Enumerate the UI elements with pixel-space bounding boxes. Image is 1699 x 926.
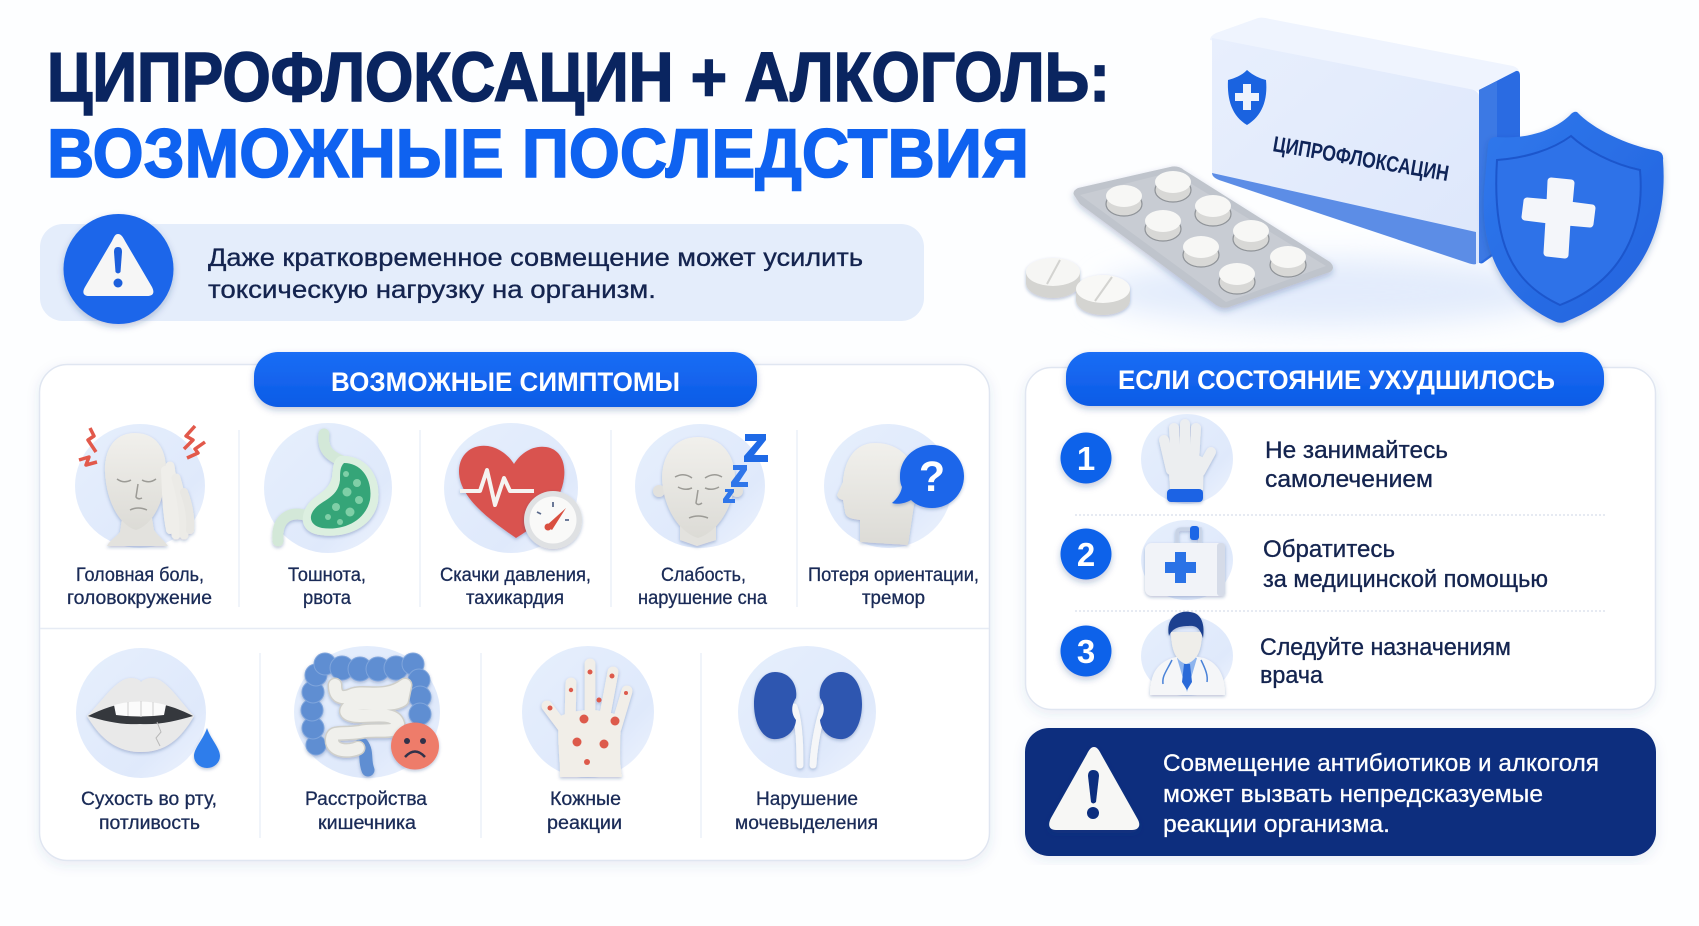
number badge 3	[1060, 626, 1112, 676]
symptom: urination disorder	[735, 646, 878, 834]
label: Кожные	[550, 789, 621, 810]
icon: sleep Z letters	[723, 434, 768, 503]
panel: symptoms	[40, 352, 990, 860]
symptom: blood pressure	[440, 423, 591, 609]
step text: Обратитесь	[1263, 536, 1395, 563]
callout: warning strip	[40, 214, 924, 324]
icon: head profile	[837, 443, 917, 545]
callout text: Даже кратковременное совмещение может усилить	[208, 244, 863, 272]
illustration: ciprofloxacin pack, blister and shield	[1026, 18, 1664, 326]
icon: head with hand	[105, 433, 190, 546]
label	[735, 789, 878, 834]
label: реакции	[547, 813, 622, 834]
icon: sad face	[391, 722, 439, 770]
label	[288, 565, 366, 609]
label	[81, 789, 217, 834]
icon: drop	[194, 728, 220, 768]
label: Головная боль,	[76, 565, 204, 586]
icon: question bubble: ?	[919, 453, 945, 501]
symptom: skin reactions	[522, 646, 654, 834]
label: Потеря ориентации,	[808, 565, 979, 586]
label	[440, 565, 591, 609]
label: тахикардия	[466, 588, 564, 609]
panel: warning note	[1025, 728, 1656, 856]
icon: lips	[87, 678, 194, 752]
icon: pressure gauge	[524, 491, 582, 549]
step text	[1263, 536, 1548, 593]
step text	[1265, 437, 1448, 493]
icon: warning triangle	[1049, 747, 1139, 830]
step text	[1260, 634, 1511, 689]
symptom: dry mouth	[76, 648, 220, 834]
title: ВОЗМОЖНЫЕ ПОСЛЕДСТВИЯ	[47, 115, 1029, 192]
label: рвота	[303, 588, 351, 609]
warning text: реакции организма.	[1163, 811, 1390, 838]
step 1	[1060, 414, 1448, 504]
warning text	[1163, 750, 1599, 838]
symptom: headache	[67, 424, 212, 609]
icon: intestine	[301, 653, 431, 770]
box label: ЦИПРОФЛОКСАЦИН	[1271, 131, 1451, 186]
icon: doctor	[1150, 612, 1225, 695]
warning text: может вызвать непредсказуемые	[1163, 781, 1543, 808]
heading: if worsened	[1066, 352, 1604, 406]
label: Сухость во рту,	[81, 789, 217, 810]
label: головокружение	[67, 588, 212, 609]
label: кишечника	[318, 813, 416, 834]
number badge 2	[1060, 528, 1112, 580]
icon: kidneys	[754, 672, 862, 765]
number badge 3: 3	[1077, 633, 1095, 670]
symptom: nausea	[264, 423, 392, 609]
callout text	[208, 244, 863, 304]
number badge 1: 1	[1077, 440, 1095, 477]
label	[67, 565, 212, 609]
step text: за медицинской помощью	[1263, 566, 1548, 593]
label: Расстройства	[305, 789, 427, 810]
callout text: токсическую нагрузку на организм.	[208, 276, 656, 304]
symptom: bowel upset	[294, 646, 440, 834]
icon: pain bolts	[79, 426, 205, 465]
large shield	[1484, 112, 1664, 323]
number badge 1	[1060, 432, 1112, 484]
step 2	[1060, 520, 1548, 600]
panel: if condition worsened	[1026, 352, 1656, 710]
step text: врача	[1260, 662, 1324, 689]
heading: symptoms: ВОЗМОЖНЫЕ СИМПТОМЫ	[331, 367, 680, 397]
label	[638, 565, 767, 609]
label: потливость	[99, 813, 200, 834]
label: Нарушение	[756, 789, 858, 810]
step text: самолечением	[1265, 466, 1433, 493]
title	[47, 38, 1110, 192]
warning text: Совмещение антибиотиков и алкоголя	[1163, 750, 1599, 777]
step 3	[1060, 612, 1511, 696]
icon: question bubble	[892, 445, 964, 508]
label: тремор	[862, 588, 925, 609]
icon: warning circle	[64, 214, 174, 324]
number badge 2: 2	[1077, 536, 1095, 573]
icon: stomach	[278, 434, 379, 541]
step text: Не занимайтесь	[1265, 437, 1448, 464]
icon: tired head	[653, 437, 743, 546]
label	[808, 565, 979, 609]
label: мочевыделения	[735, 813, 878, 834]
heading: if worsened: ЕСЛИ СОСТОЯНИЕ УХУДШИЛОСЬ	[1118, 365, 1555, 395]
label: нарушение сна	[638, 588, 767, 609]
label	[547, 789, 622, 834]
symptom: weakness	[635, 424, 768, 609]
icon: stop hand	[1164, 424, 1211, 502]
label: Тошнота,	[288, 565, 366, 586]
label: Слабость,	[661, 565, 746, 586]
label	[305, 789, 427, 834]
icon: heart	[459, 446, 564, 538]
step text: Следуйте назначениям	[1260, 634, 1511, 661]
box logo shield	[1228, 70, 1266, 125]
heading: symptoms	[254, 352, 757, 407]
medicine box	[1210, 18, 1520, 264]
icon: hand with rash	[547, 664, 628, 777]
icon: first aid kit	[1145, 526, 1225, 596]
symptom: disorientation	[808, 424, 979, 609]
title: ЦИПРОФЛОКСАЦИН + АЛКОГОЛЬ:	[47, 38, 1110, 116]
label: Скачки давления,	[440, 565, 591, 586]
blister pack	[1074, 166, 1333, 308]
loose tablets	[1026, 258, 1130, 315]
